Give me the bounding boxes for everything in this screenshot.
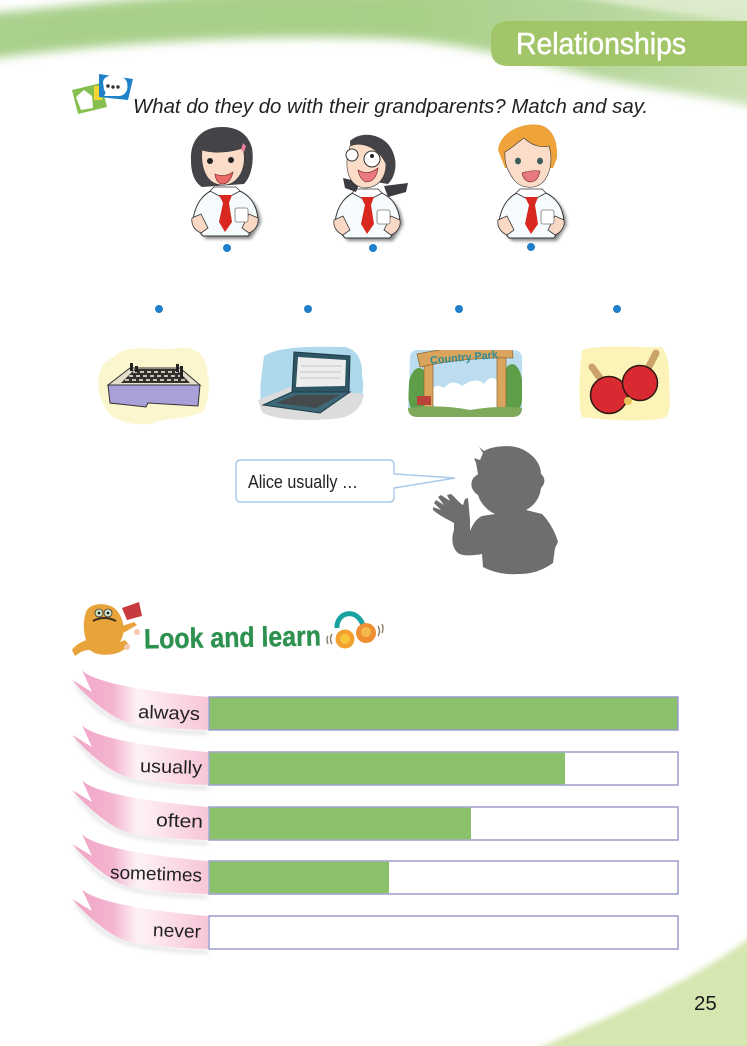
speech bubble: Alice usually ... <box>236 460 455 502</box>
silhouette: child waving <box>433 446 558 574</box>
row: often: often <box>156 809 203 832</box>
speech bubble: Alice usually ...: Alice usually … <box>248 471 358 492</box>
page number: 25 <box>694 992 717 1015</box>
icon: headphones <box>327 614 383 648</box>
chapter tab: Relationships <box>491 21 747 66</box>
row: usually: usually <box>140 755 203 778</box>
mascot: orange cat with book <box>72 602 142 656</box>
character: girl with glasses and pigtails <box>334 135 408 241</box>
row: always <box>72 670 678 733</box>
matching dots: activities <box>155 305 621 313</box>
instruction text: What do they do with their grandparents? Match and say. <box>133 95 648 118</box>
picture: chess set <box>98 348 209 424</box>
picture: laptop <box>258 347 364 420</box>
character: girl with black bob <box>191 127 261 239</box>
picture: table tennis paddles <box>579 347 670 420</box>
header green wave <box>0 0 747 108</box>
picture: Country Park gate: Country Park <box>430 349 499 367</box>
row: always: always <box>138 701 200 724</box>
matching dots: characters <box>223 243 535 252</box>
row: often <box>72 780 678 843</box>
row: never <box>72 889 678 952</box>
row: never: never <box>153 919 201 942</box>
icon: puzzle and speech activity <box>72 74 133 114</box>
row: sometimes <box>72 834 678 897</box>
character: boy with blond hair <box>498 124 567 241</box>
heading: Look and learn: Look and learn <box>144 620 321 654</box>
row: sometimes: sometimes <box>110 861 202 886</box>
row: usually <box>72 725 678 788</box>
picture: Country Park gate <box>408 346 523 418</box>
footer green corner <box>530 930 747 1046</box>
chapter tab: Relationships: Relationships <box>516 26 686 61</box>
